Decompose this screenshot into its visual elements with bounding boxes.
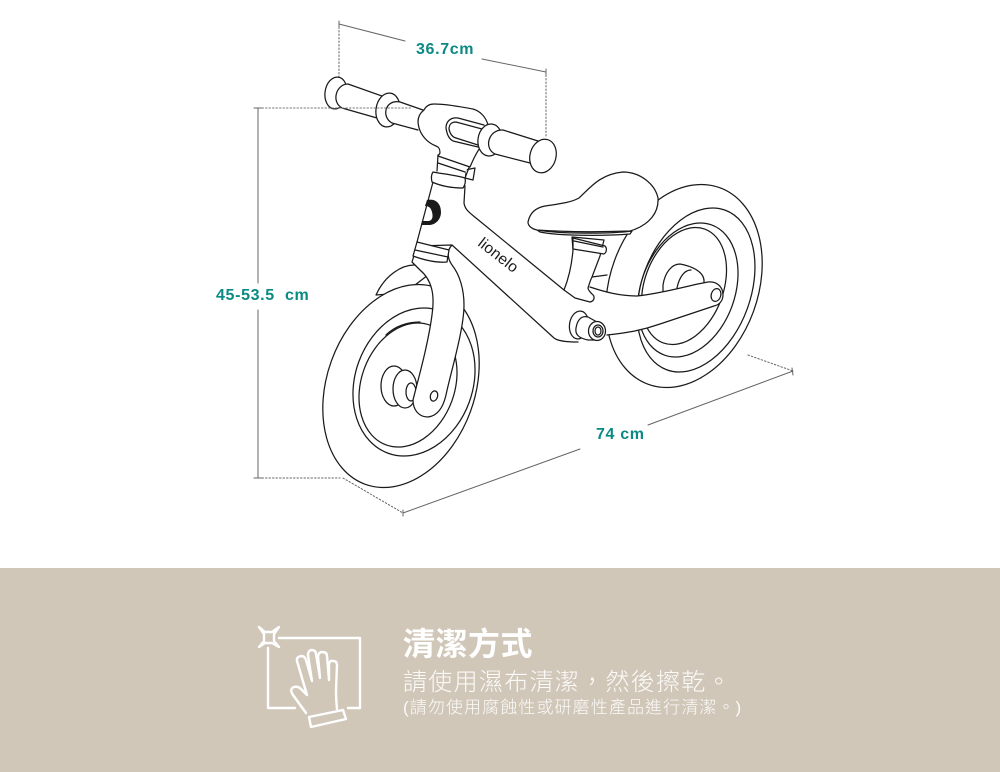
height dimension label: 45-53.5 cm [216, 287, 309, 304]
brand wordmark: lionelo [475, 235, 521, 277]
fork axle hole [429, 390, 439, 402]
frame outline [417, 182, 578, 342]
cleaning heading: 清潔方式 [403, 626, 533, 662]
stem collars [431, 147, 478, 188]
width dimension label: 36.7cm [416, 41, 474, 58]
handlebar right grip [476, 122, 560, 176]
rear fork arm outline [590, 282, 723, 335]
seat post clamp [573, 238, 606, 254]
front fork [412, 245, 464, 417]
collar line [415, 250, 448, 257]
rear wheel [579, 162, 789, 410]
handlebar left grip [323, 76, 423, 130]
frame tube fill [417, 182, 600, 343]
seat post [564, 237, 604, 302]
sparkle [259, 627, 279, 647]
icon: cleaning cloth and hand [259, 627, 360, 727]
seat [528, 172, 658, 235]
frame lower collar [413, 242, 449, 262]
clamp line [574, 241, 603, 247]
hand [291, 650, 337, 713]
cuff [309, 710, 346, 727]
bike line drawing [296, 76, 789, 510]
cloth outline [268, 638, 360, 708]
cleaning instruction: 請使用濕布清潔，然後擦乾。 [403, 669, 732, 696]
head tube badge [421, 200, 441, 225]
cleaning warning: (請勿使用腐蝕性或研磨性產品進行清潔。) [403, 698, 742, 717]
panel: cleaning band [0, 568, 1000, 772]
axle bolt [568, 310, 606, 340]
handlebar stem clamp [418, 104, 488, 167]
rear axle hole [710, 287, 722, 303]
dimension lines [254, 21, 793, 516]
length dimension label: 74 cm [596, 426, 645, 443]
height guide over handlebar [262, 107, 412, 109]
rear fork arm fill [590, 282, 723, 335]
front wheel [296, 262, 506, 510]
rear tyre brace [592, 275, 607, 277]
